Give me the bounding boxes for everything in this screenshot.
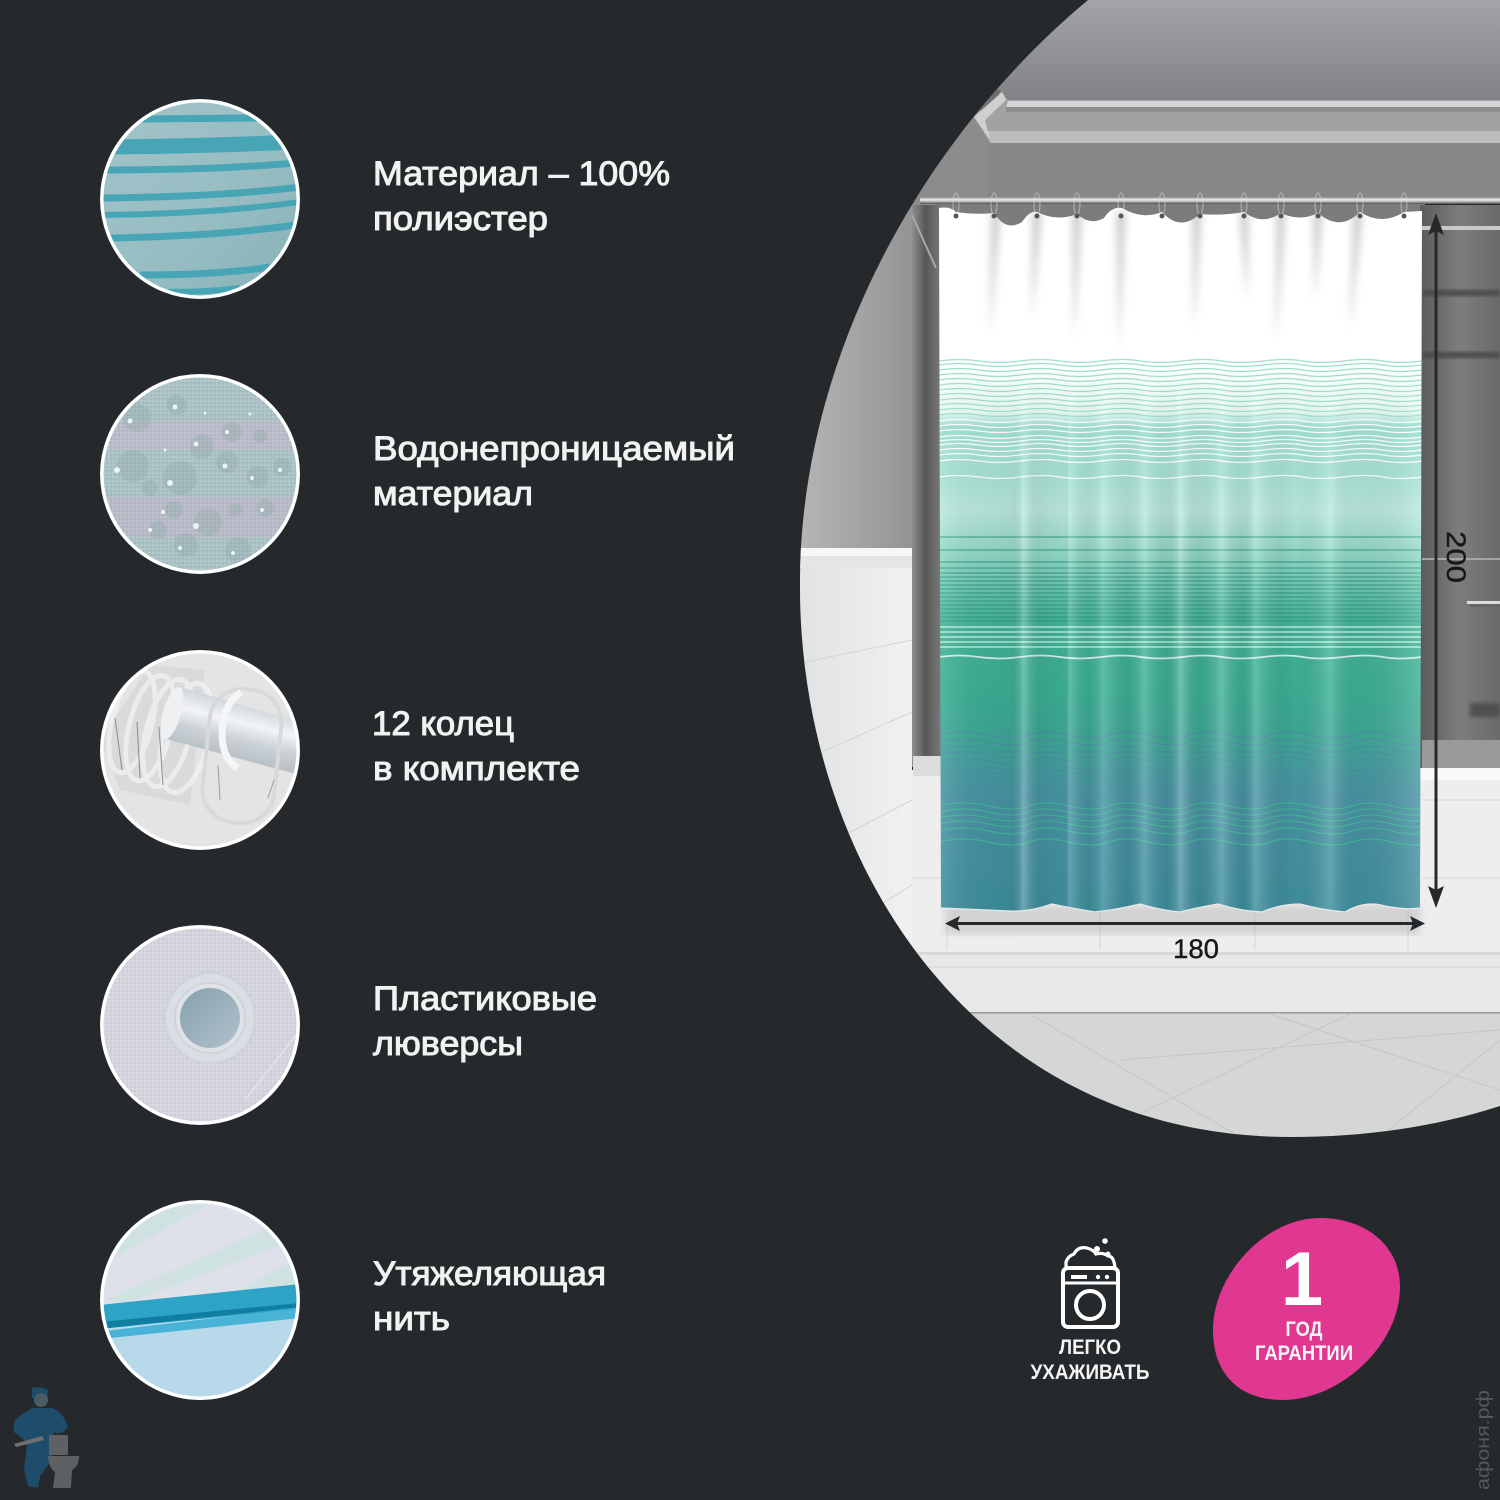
label: easy care: УХАЖИВАТЬ: [1030, 1361, 1150, 1384]
curtain rings: [953, 193, 1407, 215]
watermark: афоня.рф: [1473, 1390, 1493, 1490]
white lines on mint: [939, 420, 1422, 478]
image: water droplets: [100, 374, 300, 574]
left wainscot tiles: [800, 548, 912, 946]
text: grommets: Пластиковые: [373, 980, 597, 1018]
height arrow: [1428, 213, 1444, 908]
image: striped fabric: [100, 99, 300, 299]
text: waterproof: Водонепроницаемый: [373, 430, 735, 468]
text: rings: [372, 705, 580, 788]
feature 2: waterproof: [100, 374, 735, 574]
badge: warranty: [1213, 1218, 1400, 1400]
mint lines on white: [939, 360, 1422, 416]
text: weighted thread: [373, 1255, 606, 1338]
fold shading: [940, 416, 1421, 912]
warranty label: ГАРАНТИИ: [1255, 1342, 1353, 1365]
wall behind curtain top: [935, 204, 1425, 226]
cornice moulding: [974, 92, 1500, 143]
badge: easy care: [1030, 1238, 1150, 1384]
image: hem thread: [100, 1200, 300, 1400]
text: rings: в комплекте: [373, 750, 580, 788]
upper wall: [990, 143, 1500, 197]
icon: washing machine: [1063, 1238, 1118, 1327]
alcove frame diagonal: [912, 215, 936, 268]
feature 4: grommets: [100, 925, 597, 1125]
warranty label: ГОД: [1286, 1318, 1323, 1341]
text: waterproof: материал: [373, 475, 533, 513]
text: material: [373, 155, 670, 238]
label: easy care: [1030, 1336, 1150, 1384]
label: 180: 180: [1173, 934, 1219, 964]
image: plastic grommet: [100, 925, 300, 1125]
curtain gradient: [935, 200, 1425, 920]
skirting and floor: [880, 952, 1500, 1143]
text: material: Материал – 100%: [373, 155, 670, 193]
alcove shadow: [912, 205, 942, 767]
glass frame lines: [1422, 226, 1500, 770]
curtain rod: [920, 197, 1500, 204]
toilet: [48, 1435, 79, 1488]
label: easy care: ЛЕГКО: [1059, 1336, 1121, 1359]
top fold creases: [987, 209, 1366, 327]
logo: plumber mascot: [14, 1387, 79, 1488]
wrench: [14, 1436, 44, 1447]
text: material: полиэстер: [373, 200, 548, 238]
left wall: [790, 90, 1000, 550]
grommets: [954, 214, 1406, 218]
dark fine lines: [939, 537, 1422, 621]
text: rings: 12 колец: [372, 705, 514, 743]
bath panel tiles: [912, 756, 1500, 956]
green lines on blue: [939, 803, 1432, 845]
feature 5: weighted thread: [100, 1200, 606, 1400]
glass panel right: [1420, 205, 1500, 770]
text: waterproof: [373, 430, 735, 513]
image: rod and rings: [100, 650, 300, 850]
shower curtain: [935, 200, 1432, 920]
pink blob: [1213, 1218, 1400, 1400]
feature 3: rings: [100, 650, 580, 850]
white line on green: [939, 656, 1422, 658]
warranty label: [1255, 1318, 1353, 1365]
warranty number: 1: [1281, 1237, 1323, 1322]
blue lines on green: [939, 732, 1432, 800]
ceiling: [984, 0, 1500, 104]
text: grommets: люверсы: [373, 1025, 523, 1063]
upper side wall: [912, 110, 990, 205]
pale lines on green: [939, 627, 1422, 647]
plumber figure: [14, 1387, 68, 1488]
text: weighted thread: Утяжеляющая: [373, 1255, 606, 1293]
label: 200: 200: [1441, 531, 1471, 583]
hem edge: [941, 904, 1420, 912]
faucet: [1467, 601, 1500, 607]
width arrow: [945, 916, 1425, 931]
text: weighted thread: нить: [373, 1300, 450, 1338]
panel: bathroom photo: [790, 0, 1500, 1143]
text: grommets: [373, 980, 597, 1063]
curtain shadow on tiles: [945, 905, 1420, 935]
feature 1: material: [100, 99, 670, 299]
